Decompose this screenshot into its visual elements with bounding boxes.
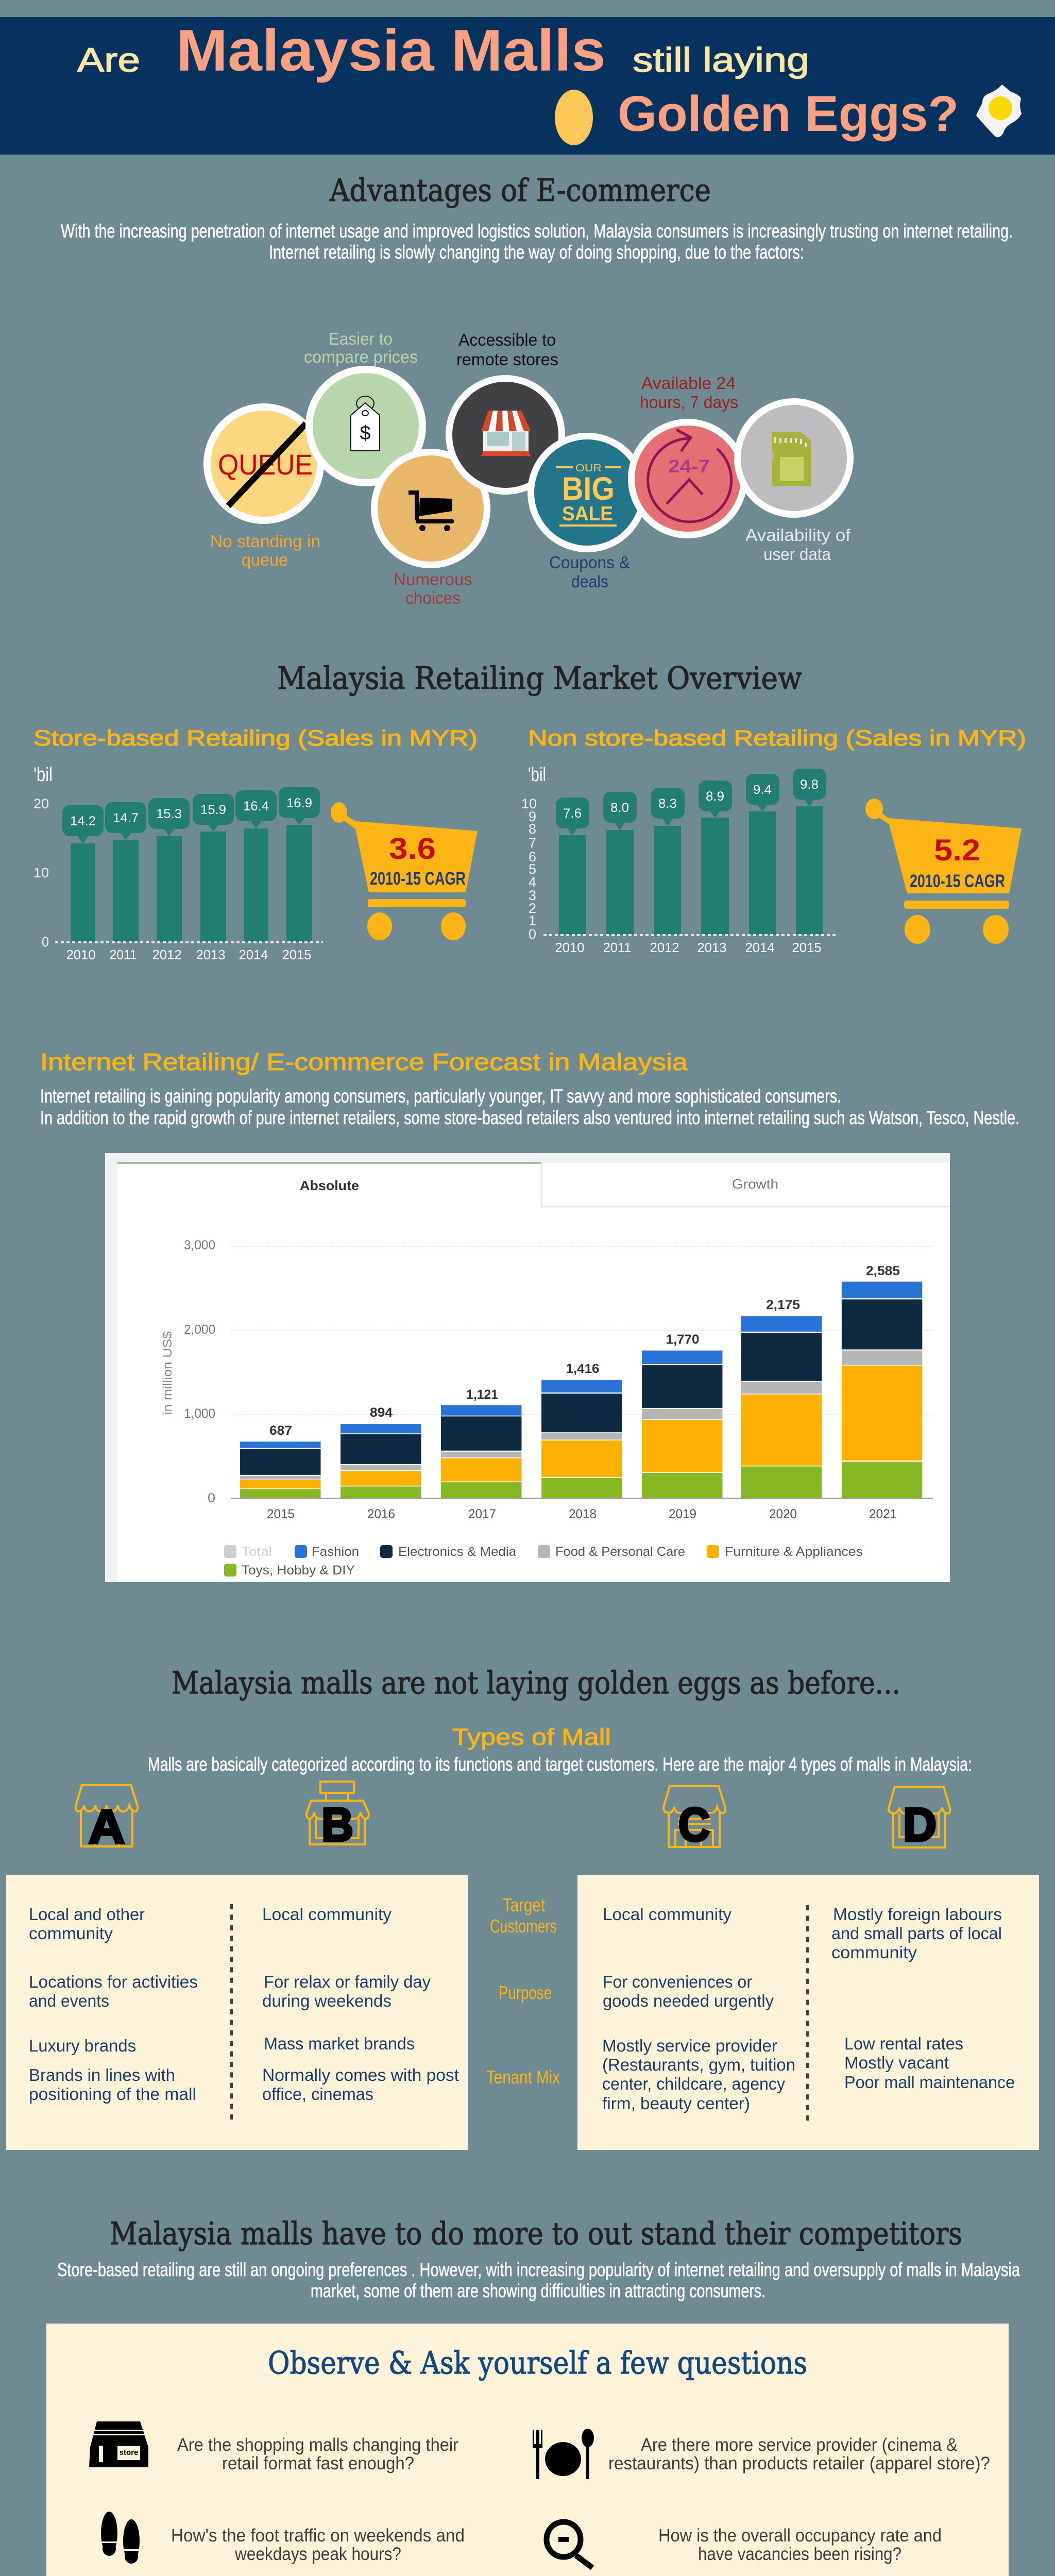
chart: non store-based retailing: 3 (529, 888, 536, 903)
label: availability of user data: user data (763, 545, 831, 564)
question 1 (177, 2435, 458, 2473)
legend: Toys, Hobby & DIY (242, 1563, 355, 1578)
text: store-based retailing: market, some of them are showing difficulties in attracting consumers. (311, 2280, 765, 2301)
column: type C: Local community (603, 1905, 731, 1924)
bar totals: 2,175 (766, 1298, 800, 1312)
chart: store-based retailing: 2011 (109, 947, 137, 962)
bar totals: 1,121 (466, 1387, 498, 1402)
x axis years: 2017 (468, 1507, 496, 1521)
panel: mall types A and B (6, 1875, 468, 2150)
cart: 3.6 CAGR: 2010-15 CAGR (370, 869, 466, 889)
label: remote stores: remote stores (456, 350, 558, 369)
column: type A: community (29, 1924, 113, 1943)
legend: Food & Personal Care (555, 1545, 685, 1559)
column: type C: Mostly service provider (602, 2036, 777, 2055)
cart: 3.6 CAGR: 3.6 (389, 832, 436, 866)
title: Golden Eggs?: Golden Eggs? (618, 86, 959, 142)
legend: Furniture & Appliances (725, 1545, 863, 1559)
bar totals: 1,416 (566, 1362, 600, 1376)
circle: coupons and deals: SALE (562, 503, 613, 525)
icon: mall type B: B (321, 1799, 353, 1851)
chart: store-based retailing: 0 (42, 934, 49, 950)
cart: 5.2 CAGR (865, 799, 1022, 944)
label: numerous choices (394, 570, 472, 607)
question 4: How is the overall occupancy rate and (658, 2526, 942, 2546)
x axis years (267, 1507, 897, 1521)
circle: coupons and deals (528, 433, 647, 552)
text: internet retailing intro (40, 1086, 1019, 1128)
label: availability of user data: Availability of (745, 526, 851, 545)
column: type C: center, childcare, agency (602, 2074, 785, 2093)
question 1: Are the shopping malls changing their (177, 2435, 458, 2455)
icon: magnifier (547, 2522, 592, 2568)
question 2 (608, 2435, 990, 2473)
column: type D: and small parts of local (831, 1924, 1002, 1943)
column: type C: (Restaurants, gym, tuition (602, 2055, 795, 2074)
panel heading: Observe & Ask yourself a few questions (268, 2345, 807, 2381)
legend: Electronics & Media (398, 1545, 516, 1559)
x axis years: 2015 (267, 1507, 295, 1521)
chart: store-based retailing: 15.9 (200, 803, 226, 817)
chart: non store-based retailing: 2015 (792, 940, 821, 955)
cart: 3.6 CAGR (331, 802, 478, 940)
column: type A: Locations for activities (29, 1972, 198, 1991)
column: type D: Poor mall maintenance (844, 2073, 1015, 2092)
column: type D (831, 1905, 1015, 2092)
bar totals: 2,585 (866, 1264, 900, 1278)
label: no standing in queue (210, 532, 320, 569)
question 2: restaurants) than products retailer (apparel store)? (608, 2453, 990, 2473)
circle: available 24-7 (628, 419, 747, 538)
label: available 24 hours: hours, 7 days (640, 393, 738, 412)
column: type B: office, cinemas (262, 2084, 373, 2104)
question 2: Are there more service provider (cinema & (641, 2435, 958, 2455)
chart: store-based retailing (33, 726, 478, 962)
label: numerous choices: Numerous (394, 570, 472, 589)
chart: non store-based retailing: 8.3 (658, 796, 677, 811)
legend (224, 1545, 863, 1578)
column: type C (602, 1905, 795, 2113)
x axis years: 2016 (367, 1507, 395, 1521)
label: compare prices: Easier to (329, 329, 393, 348)
icon: golden egg (555, 90, 593, 145)
question 1: retail format fast enough? (222, 2453, 414, 2473)
column: type A: and events (29, 1991, 109, 2010)
tab labels (300, 1176, 778, 1193)
icon: mall type D (889, 1787, 950, 1851)
label: numerous choices: choices (405, 588, 461, 607)
chart: store-based retailing: 16.9 (286, 796, 312, 810)
column: type D: Low rental rates (844, 2034, 963, 2053)
y axis: 3,000 (184, 1238, 215, 1252)
stacked bars (240, 1282, 922, 1498)
x axis years: 2018 (569, 1507, 597, 1521)
chart title: Non store-based Retailing (Sales in MYR) (528, 726, 1026, 751)
x axis years: 2021 (869, 1507, 897, 1521)
circle: no queue (203, 403, 324, 524)
panel: questions (46, 2324, 1009, 2576)
label: compare prices (304, 329, 418, 366)
icon: store (89, 2421, 148, 2467)
legend: Fashion (312, 1545, 359, 1559)
chart: store-based retailing: 15.3 (156, 807, 182, 821)
label: no standing in queue: queue (242, 550, 288, 569)
icon: cutlery (533, 2429, 594, 2479)
circle: coupons and deals: OUR (575, 463, 602, 474)
label: remote stores: Accessible to (458, 330, 556, 349)
chart: non store-based retailing: 10 (521, 796, 537, 811)
label: compare prices: compare prices (304, 347, 418, 366)
circle: compare prices (305, 366, 426, 486)
label: remote stores (456, 330, 558, 369)
cart: 5.2 CAGR: 5.2 (934, 834, 980, 867)
title: Malaysia Malls: Malaysia Malls (176, 18, 606, 83)
chart: store-based retailing: 2010 (66, 947, 96, 962)
bar totals: 1,770 (666, 1332, 700, 1347)
chart: store-based retailing: 2013 (196, 947, 226, 962)
label: available 24 hours (640, 374, 738, 412)
column: type B: during weekends (262, 1991, 392, 2010)
circle: available 24-7: 24-7 (668, 456, 710, 477)
bar totals (269, 1264, 900, 1438)
chart: non store-based retailing: 9.8 (800, 777, 819, 792)
column: type B: Local community (262, 1905, 392, 1924)
title: Are: Are (77, 41, 140, 79)
chart: non store-based retailing: 8 (529, 821, 536, 837)
circle: compare prices: $ (360, 422, 371, 444)
section: advantages of e-commerce (61, 173, 1013, 607)
question 4: have vacancies been rising? (698, 2544, 901, 2564)
chart: store-based retailing: 20 (33, 796, 49, 811)
column: type A (29, 1905, 198, 2104)
icon: footprints (100, 2512, 141, 2564)
icon: fried egg (976, 84, 1022, 137)
label: coupons and deals: Coupons & (549, 553, 630, 572)
icon: mall type C (663, 1786, 725, 1851)
header banner (0, 17, 1055, 155)
chart: non store-based retailing: 2014 (745, 940, 775, 955)
heading: internet retailing forecast: Internet Retailing/ E-commerce Forecast in Malaysia (40, 1048, 688, 1075)
chart: non store-based retailing: 8.0 (610, 801, 629, 815)
tab labels: Absolute (300, 1178, 359, 1193)
icon: mall type A (76, 1785, 138, 1853)
circle: user data (734, 398, 854, 518)
row labels: Target (503, 1894, 545, 1916)
column: type C: For conveniences or (603, 1972, 752, 1991)
column: type C: goods needed urgently (603, 1991, 774, 2010)
column: type A: Local and other (29, 1905, 145, 1924)
chart: store-based retailing: 2014 (239, 947, 268, 962)
chart: non store-based retailing: 2010 (555, 940, 584, 955)
row labels: Purpose (499, 1982, 552, 2003)
text: internet retailing intro: Internet retailing is gaining popularity among consumers, particularly younger, IT savvy and more sophisticated consumers. (40, 1086, 841, 1107)
circle: coupons and deals: BIG (562, 471, 615, 507)
column: type C: firm, beauty center) (602, 2094, 750, 2113)
chart: non store-based retailing: 9.4 (753, 783, 772, 797)
column: type B: For relax or family day (264, 1972, 431, 1991)
circle: no queue: QUEUE (218, 448, 313, 481)
y axis (161, 1238, 215, 1505)
column: type D: Mostly foreign labours (833, 1905, 1002, 1924)
y axis: 2,000 (184, 1323, 215, 1337)
chart: store-based retailing: 2012 (152, 947, 181, 962)
label: no standing in queue: No standing in (210, 532, 320, 551)
chart: non store-based retailing: 9 (529, 809, 536, 824)
chart title: Store-based Retailing (Sales in MYR) (33, 726, 478, 751)
chart: store-based retailing: 14.7 (113, 811, 139, 825)
chart: non store-based retailing: 6 (529, 849, 536, 865)
heading: types of mall: Types of Mall (452, 1724, 611, 1750)
row labels (486, 1894, 560, 2088)
row labels: Customers (490, 1916, 557, 1937)
chart: non store-based retailing: 7 (529, 835, 536, 851)
icon: mall type D: D (903, 1799, 937, 1851)
chart: non store-based retailing: 5 (529, 861, 536, 877)
y axis: in million US$ (161, 1331, 175, 1415)
text: store-based retailing (57, 2259, 1020, 2301)
chart: non store-based retailing (521, 726, 1026, 955)
title: still laying: still laying (633, 41, 809, 79)
chart: non store-based retailing: 8.9 (706, 789, 724, 804)
column: type B (262, 1905, 459, 2104)
label: available 24 hours: Available 24 (641, 374, 736, 393)
x axis years: 2020 (769, 1507, 797, 1521)
column: type D: Mostly vacant (844, 2053, 949, 2072)
bar totals: 687 (269, 1423, 292, 1438)
circle: remote stores (446, 375, 565, 495)
question 3 (171, 2526, 465, 2564)
icon: store: store (120, 2448, 138, 2457)
icon: mall type B (307, 1782, 369, 1851)
row labels: Tenant Mix (486, 2066, 560, 2088)
chart: e-commerce forecast stacked bars (105, 1153, 950, 1582)
column: type A: Luxury brands (29, 2036, 136, 2055)
icon: mall type A: A (89, 1801, 125, 1853)
chart: non store-based retailing: 2011 (603, 940, 632, 955)
heading: market overview: Malaysia Retailing Market Overview (277, 660, 802, 697)
chart: non store-based retailing: 4 (529, 874, 536, 890)
label: availability of user data (745, 526, 851, 564)
chart: non store-based retailing: 2 (529, 901, 536, 916)
column: type A: positioning of the mall (29, 2084, 196, 2104)
chart: store-based retailing: 10 (33, 865, 49, 880)
question 3: weekdays peak hours? (234, 2544, 401, 2564)
column: type D: community (831, 1943, 917, 1962)
question 3: How's the foot traffic on weekends and (171, 2526, 465, 2546)
heading: not laying golden eggs: Malaysia malls are not laying golden eggs as before... (172, 1665, 900, 1701)
panel: mall types C and D (577, 1875, 1039, 2150)
y axis: 0 (208, 1491, 215, 1505)
tab labels: Growth (732, 1176, 778, 1192)
icon: mall type C: C (678, 1799, 710, 1851)
cart: 5.2 CAGR: 2010-15 CAGR (910, 871, 1005, 891)
legend: Total (242, 1545, 272, 1559)
label: coupons and deals: deals (571, 572, 608, 591)
intro text (61, 221, 1013, 263)
chart: store-based retailing: 14.2 (70, 814, 96, 828)
chart: store-based retailing: 'bil (33, 764, 53, 786)
chart: non store-based retailing: 0 (529, 926, 536, 942)
chart: non store-based retailing: 7.6 (563, 806, 582, 821)
heading: Advantages of E-commerce (329, 173, 711, 209)
x axis years: 2019 (669, 1507, 696, 1521)
column: type A: Brands in lines with (29, 2065, 175, 2084)
chart: non store-based retailing: 2013 (697, 940, 726, 955)
label: coupons and deals (549, 553, 630, 591)
column: type B: Normally comes with post (262, 2065, 459, 2084)
chart: non store-based retailing: 1 (529, 913, 536, 928)
chart: store-based retailing: 16.4 (243, 799, 269, 814)
column: type B: Mass market brands (264, 2034, 415, 2053)
chart: non store-based retailing: 2012 (650, 940, 679, 955)
chart: store-based retailing: 2015 (282, 947, 311, 962)
chart: non store-based retailing: 'bil (528, 764, 546, 786)
bar totals: 894 (370, 1405, 393, 1420)
intro text: Internet retailing is slowly changing the way of doing shopping, due to the factors: (269, 242, 804, 263)
question 4 (658, 2526, 942, 2564)
circle: numerous choices (371, 449, 490, 568)
y axis: 1,000 (184, 1406, 215, 1421)
